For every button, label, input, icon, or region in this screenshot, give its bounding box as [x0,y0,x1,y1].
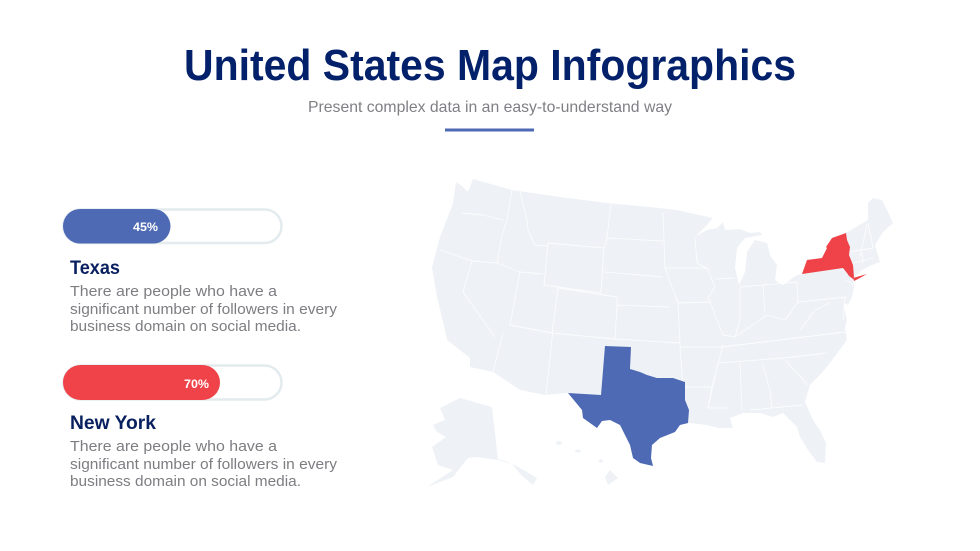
progress bar: New York 70% [63,365,282,400]
text block: New York description: There are people who have a [70,438,278,455]
state: New York [802,233,867,281]
map: United States [427,179,893,487]
text block: New York description: business domain on social media. [70,473,301,490]
title: United States Map Infographics [184,41,796,90]
Alaska [427,398,537,487]
contiguous states [432,179,893,463]
state borders [440,190,873,410]
subtitle: Present complex data in an easy-to-understand way [308,99,672,116]
panel: Texas [63,209,338,335]
progress bar: Texas 45%: 45% [133,220,158,234]
text block: Texas description: significant number of followers in every [70,301,338,318]
text block: Texas description: There are people who have a [70,283,278,300]
text block: Texas description [70,283,338,335]
title underline [445,128,534,132]
heading: New York: New York [70,413,156,434]
Hawaii [556,441,618,485]
text block: Texas description: business domain on social media. [70,318,301,335]
text block: New York description: significant number of followers in every [70,456,338,473]
text block: New York description [70,438,338,490]
panel: New York [63,365,338,490]
progress bar: Texas 45% [63,209,282,244]
heading: Texas: Texas [70,258,120,279]
progress bar: New York 70%: 70% [184,377,209,391]
state: Texas [568,346,689,466]
